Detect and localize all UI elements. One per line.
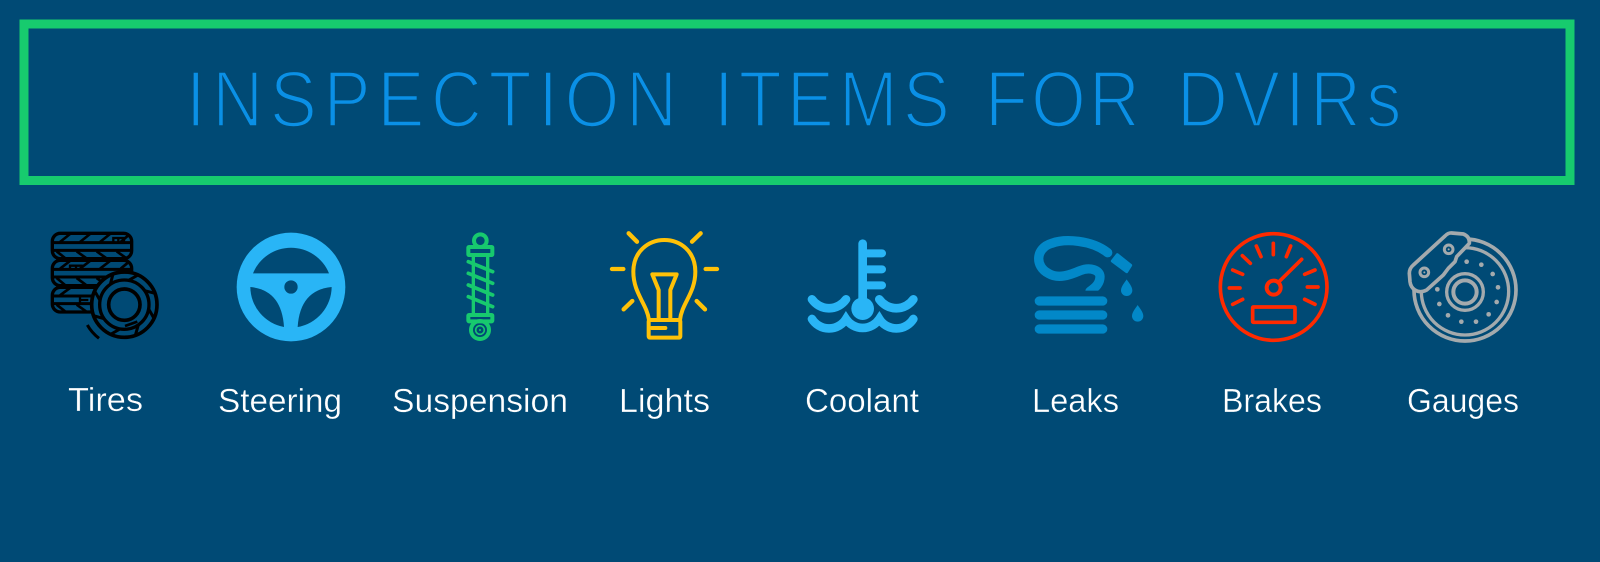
- item: gauges: [1407, 233, 1519, 419]
- item: steering: [218, 233, 345, 419]
- item: brakes: [1220, 234, 1327, 419]
- icon: shock absorber: [468, 234, 493, 339]
- icon: steering wheel: [237, 233, 345, 341]
- title frame: [24, 24, 1570, 180]
- title: [186, 54, 1401, 143]
- label: Lights: Lights: [619, 382, 710, 419]
- item: suspension: [392, 234, 568, 419]
- label: Gauges: Gauges: [1407, 382, 1519, 419]
- item: leaks: [1032, 241, 1143, 419]
- title: FOR: [985, 54, 1140, 143]
- icon: light bulb: [612, 233, 717, 338]
- label: Leaks: Leaks: [1032, 382, 1119, 419]
- label: Suspension: Suspension: [392, 382, 568, 419]
- icon: speedometer gauge: [1220, 234, 1327, 340]
- label: Tires: Tires: [68, 381, 143, 418]
- label: Brakes: Brakes: [1222, 382, 1322, 419]
- item: tires: [52, 233, 157, 418]
- icon: brake disc: [1409, 233, 1516, 341]
- icon: leaking hose: [1039, 241, 1143, 329]
- icon: tires: [52, 233, 157, 338]
- label: Coolant: Coolant: [805, 382, 919, 419]
- item: lights: [612, 233, 717, 419]
- icon: coolant temperature: [812, 244, 913, 328]
- item: coolant: [805, 244, 919, 419]
- label: Steering: Steering: [218, 382, 342, 419]
- title: ITEMS: [714, 54, 950, 143]
- title: INSPECTION: [186, 54, 677, 143]
- title: DVIRs: [1177, 54, 1401, 143]
